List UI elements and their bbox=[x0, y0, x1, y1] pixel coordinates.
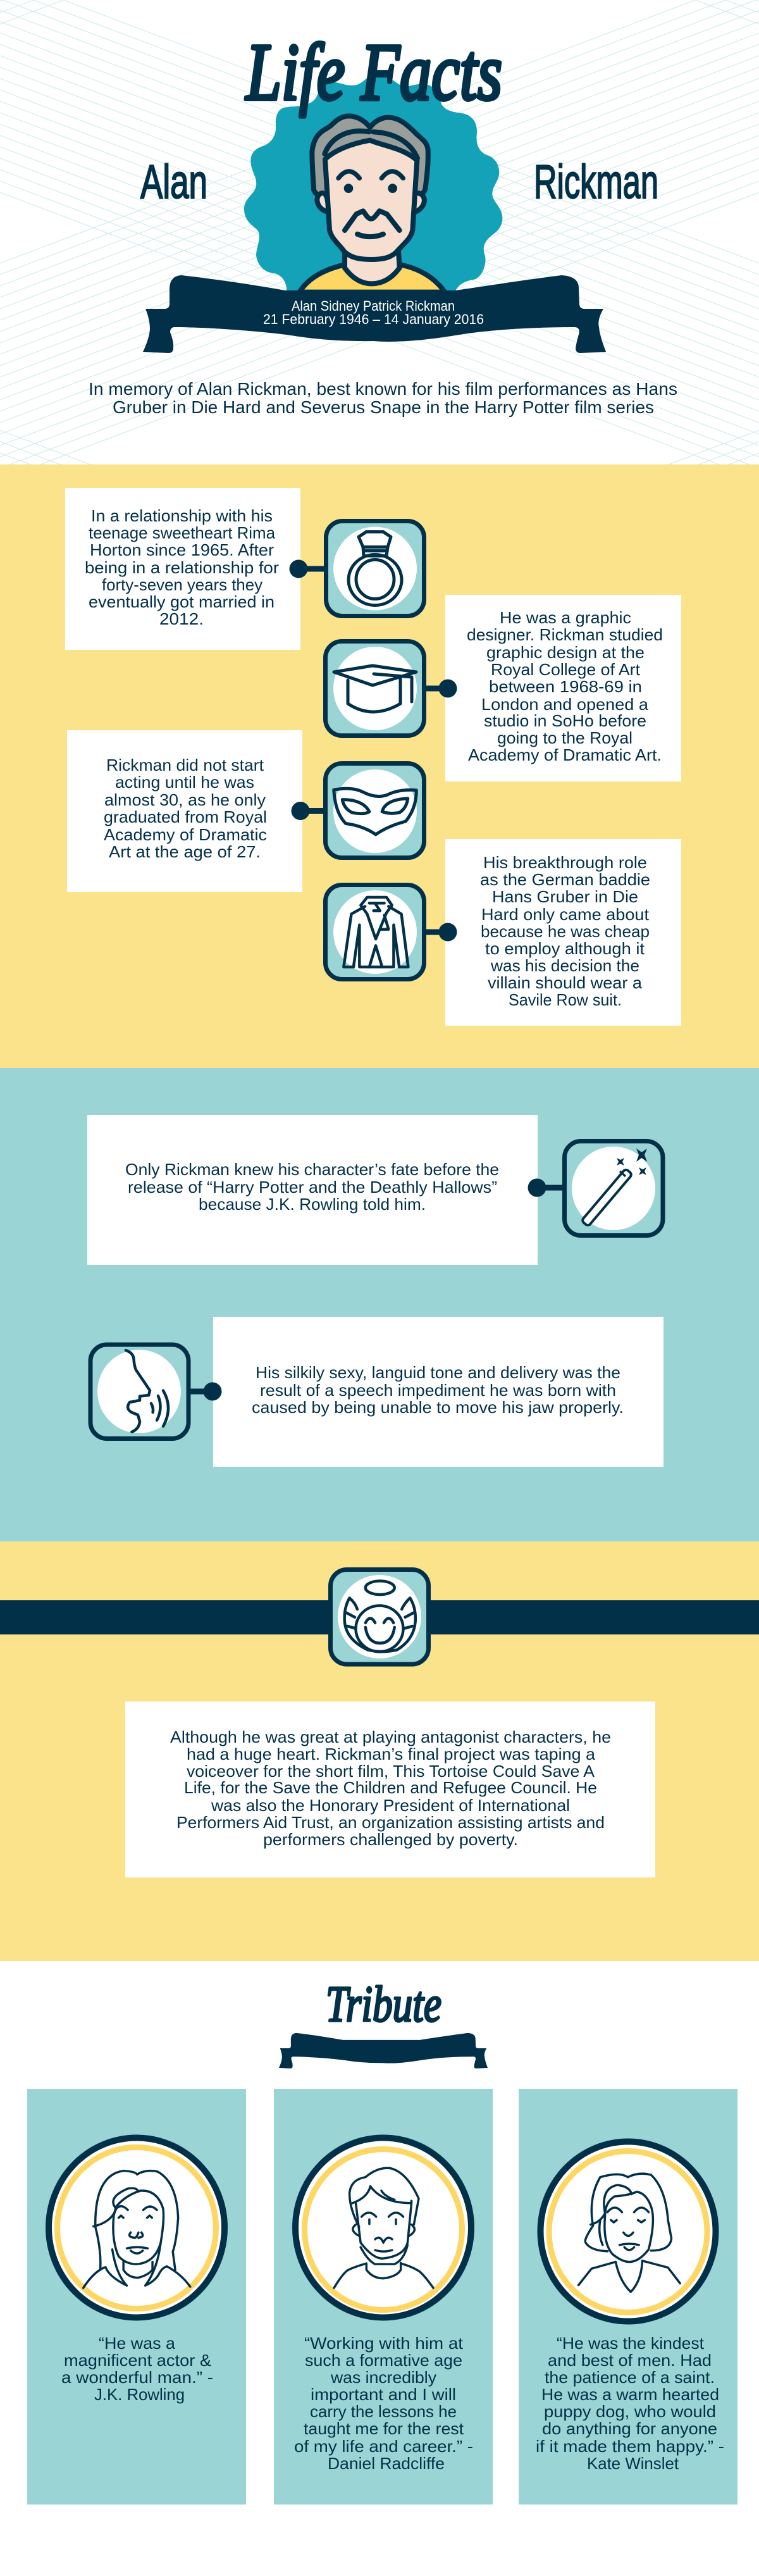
quote bbox=[536, 2334, 724, 2473]
card: huge heart: Performers Aid Trust, an organization assisting artists and bbox=[176, 1813, 605, 1832]
card: huge heart: Life, for the Save the Children and Refugee Council. He bbox=[184, 1778, 597, 1797]
card: speech impediment bbox=[213, 1317, 663, 1467]
card: huge heart bbox=[125, 1702, 655, 1877]
card: Hans Gruber breakthrough: Hard only came about bbox=[481, 905, 650, 924]
card: graphic designer: He was a graphic bbox=[500, 608, 631, 627]
card: Hans Gruber breakthrough: because he was cheap bbox=[481, 922, 650, 941]
portrait: Kate Winslet bbox=[540, 2141, 716, 2321]
card: Snape's fate: because J.K. Rowling told him. bbox=[199, 1195, 426, 1214]
heading: Alan: Alan bbox=[140, 155, 207, 208]
card: speech impediment: caused by being unable to move his jaw properly. bbox=[252, 1398, 624, 1417]
quote: a wonderful man.” - bbox=[61, 2368, 213, 2387]
quote: of my life and career.” - bbox=[294, 2437, 473, 2456]
panel: tribute Daniel Radcliffe bbox=[274, 2089, 493, 2504]
card: Hans Gruber breakthrough: was his decision the bbox=[490, 956, 639, 975]
card: Hans Gruber breakthrough: Hans Gruber in Die bbox=[492, 887, 638, 906]
card: graphic designer: between 1968-69 in bbox=[489, 677, 642, 696]
quote: taught me for the rest bbox=[304, 2419, 464, 2438]
quote: do anything for anyone bbox=[542, 2419, 717, 2438]
quote: Kate Winslet bbox=[587, 2454, 679, 2473]
card: huge heart: performers challenged by poverty. bbox=[263, 1830, 518, 1849]
panel: tribute J.K. Rowling bbox=[27, 2089, 246, 2504]
heading: Rickman: Rickman bbox=[534, 155, 658, 208]
icon: smiling angel bbox=[330, 1569, 429, 1664]
ribbon text bbox=[263, 298, 484, 327]
card: huge heart: voiceover for the short film, This Tortoise Could Save A bbox=[187, 1762, 595, 1781]
card: speech impediment: result of a speech impediment he was born with bbox=[260, 1381, 616, 1400]
hair bbox=[312, 116, 428, 195]
quote: and best of men. Had bbox=[548, 2351, 712, 2370]
panel: tribute Kate Winslet bbox=[519, 2089, 737, 2504]
card: graphic designer bbox=[445, 595, 681, 781]
card: late acting start: acting until he was bbox=[115, 773, 254, 792]
icon: suit jacket bbox=[325, 885, 457, 980]
panel: yellow big heart section bbox=[0, 1541, 759, 1961]
card: graphic designer: Royal College of Art bbox=[491, 660, 641, 679]
card: Hans Gruber breakthrough bbox=[445, 839, 681, 1026]
quote bbox=[294, 2334, 473, 2473]
card: Snape's fate: Only Rickman knew his character’s fate before the bbox=[125, 1160, 499, 1179]
ribbon banner with name and dates bbox=[143, 275, 606, 353]
card: Hans Gruber breakthrough: to employ although it bbox=[485, 939, 645, 958]
card: late acting start: Rickman did not start bbox=[106, 756, 264, 775]
ribbon shape bbox=[143, 275, 606, 353]
quote: magnificent actor & bbox=[64, 2351, 211, 2370]
quote: carry the lessons he bbox=[310, 2402, 457, 2421]
card: relationship: 2012. bbox=[159, 609, 204, 628]
card: late acting start: Art at the age of 27. bbox=[109, 842, 261, 861]
quote: “He was a bbox=[99, 2334, 176, 2353]
navy band bbox=[0, 1600, 759, 1634]
card: late acting start: almost 30, as he only bbox=[104, 790, 266, 809]
quote bbox=[61, 2334, 213, 2404]
ribbon text: Alan Sidney Patrick Rickman bbox=[292, 298, 455, 314]
card: graphic designer: graphic design at the bbox=[486, 643, 645, 662]
card: relationship: teenage sweetheart Rima bbox=[89, 523, 276, 542]
face bbox=[325, 140, 417, 259]
card: Hans Gruber breakthrough: villain should wear a bbox=[488, 973, 643, 992]
section background bbox=[0, 1541, 759, 1961]
intro text: Gruber in Die Hard and Severus Snape in the Harry Potter film series bbox=[113, 397, 654, 417]
card: graphic designer: studio in SoHo before bbox=[484, 711, 646, 730]
section background bbox=[0, 1068, 759, 1541]
intro text: In memory of Alan Rickman, best known for his film performances as Hans bbox=[89, 379, 677, 399]
quote: He was a warm hearted bbox=[541, 2385, 719, 2404]
icon: magic wand bbox=[528, 1142, 663, 1235]
card: relationship: forty-seven years they bbox=[102, 575, 262, 594]
eyebrows eyes moustache mouth bbox=[338, 171, 403, 237]
card: relationship bbox=[65, 488, 300, 650]
card: graphic designer: London and opened a bbox=[481, 695, 649, 714]
icon: ring bbox=[290, 521, 424, 616]
card: late acting start: Academy of Dramatic bbox=[104, 825, 267, 844]
ears bbox=[317, 193, 424, 212]
card: Hans Gruber breakthrough: His breakthrough role bbox=[483, 853, 647, 872]
card: huge heart: had a huge heart. Rickman’s final project was taping a bbox=[187, 1745, 596, 1764]
shirt bbox=[299, 264, 445, 292]
card: relationship: being in a relationship for bbox=[85, 558, 279, 577]
quote: Daniel Radcliffe bbox=[328, 2454, 445, 2473]
card: relationship: eventually got married in bbox=[89, 592, 275, 611]
title: Life Facts: Life Facts bbox=[245, 27, 502, 117]
portrait: Daniel Radcliffe bbox=[295, 2137, 471, 2317]
neck bbox=[345, 251, 400, 283]
quote: J.K. Rowling bbox=[94, 2385, 185, 2404]
card: graphic designer: going to the Royal bbox=[497, 728, 632, 747]
card: Snape's fate: release of “Harry Potter and the Deathly Hallows” bbox=[128, 1178, 497, 1197]
card: late acting start bbox=[67, 730, 302, 892]
card: graphic designer: Academy of Dramatic Art. bbox=[468, 745, 662, 764]
card: late acting start: graduated from Royal bbox=[104, 807, 267, 826]
portrait: J.K. Rowling bbox=[49, 2137, 225, 2317]
blue wavy blob bbox=[244, 74, 502, 291]
card: huge heart: Although he was great at playing antagonist characters, he bbox=[170, 1727, 611, 1746]
quote: the patience of a saint. bbox=[545, 2368, 715, 2387]
intro text bbox=[89, 379, 677, 417]
card: Hans Gruber breakthrough: Savile Row suit. bbox=[509, 990, 622, 1009]
card: huge heart: was also the Honorary President of International bbox=[211, 1796, 570, 1815]
card: Snape's fate bbox=[87, 1115, 538, 1265]
quote: was incredibly bbox=[330, 2368, 436, 2387]
icon: graduation cap bbox=[325, 642, 457, 735]
heading: Tribute: Tribute bbox=[326, 1977, 441, 2032]
quote: “He was the kindest bbox=[557, 2334, 705, 2353]
quote: if it made them happy.” - bbox=[536, 2437, 724, 2456]
small ribbon bbox=[279, 2033, 488, 2069]
hair strands bbox=[324, 131, 417, 158]
quote: puppy dog, who would bbox=[544, 2402, 716, 2421]
icon: speaking profile bbox=[90, 1345, 221, 1439]
icon: mask bbox=[291, 763, 424, 858]
quote: important and I will bbox=[311, 2385, 456, 2404]
section background bbox=[0, 464, 759, 1068]
card: relationship: Horton since 1965. After bbox=[90, 540, 274, 559]
card: graphic designer: designer. Rickman studied bbox=[467, 625, 663, 644]
panel: yellow early life section bbox=[0, 464, 759, 1068]
card: Hans Gruber breakthrough: as the German baddie bbox=[480, 870, 650, 889]
card: speech impediment: His silkily sexy, languid tone and delivery was the bbox=[256, 1363, 620, 1382]
quote: “Working with him at bbox=[304, 2334, 464, 2353]
quote: such a formative age bbox=[305, 2351, 462, 2370]
ribbon text: 21 February 1946 – 14 January 2016 bbox=[263, 311, 484, 327]
panel: teal facts section bbox=[0, 1068, 759, 1541]
header illustration: portrait of Alan Rickman bbox=[244, 74, 502, 292]
card: relationship: In a relationship with his bbox=[91, 506, 273, 525]
